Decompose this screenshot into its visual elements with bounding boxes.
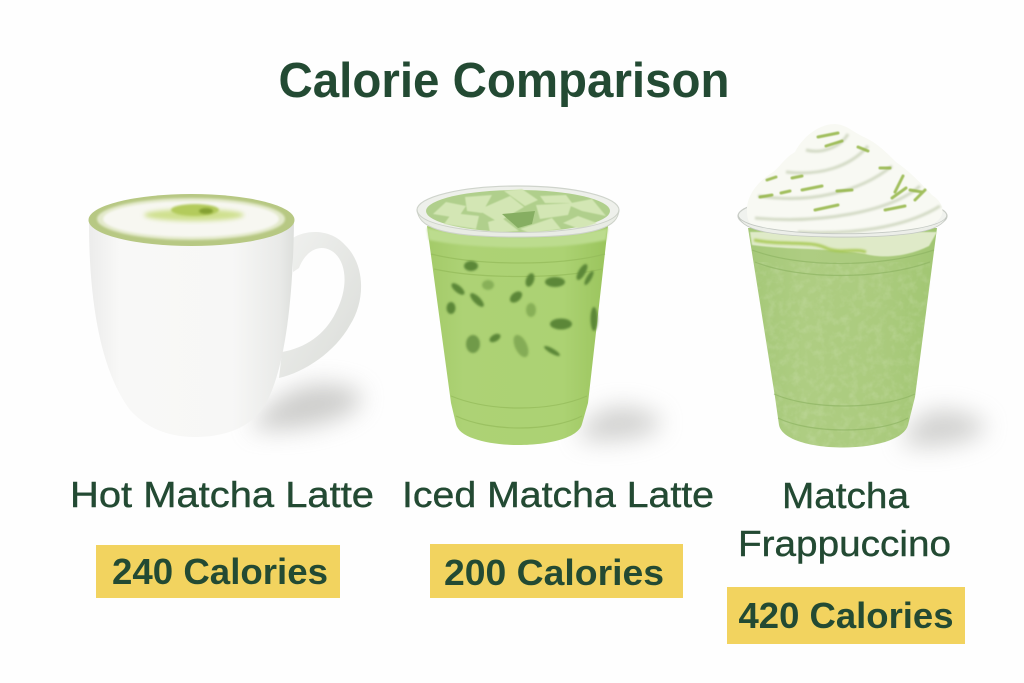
cup ridges [752,250,934,430]
cup body [748,228,937,448]
calorie badge: 240 [96,545,340,598]
calorie badge: 240: 240 Calories [112,551,328,592]
label: matcha frappuccino: Frappuccino [738,523,951,564]
ice surface [426,190,610,232]
cup shadow [902,410,985,447]
cream swirl shading [755,134,940,233]
foam band [427,228,608,248]
calorie badge: 420: 420 Calories [738,595,954,636]
drink: iced matcha latte cup [417,186,661,445]
calorie badge: 200: 200 Calories [444,552,664,593]
cup liquid [427,226,608,445]
latte surface [88,194,294,246]
title: Calorie Comparison [278,54,730,108]
cup shadow [578,407,661,441]
lid rim back [417,186,619,234]
calorie badge: 200 [430,544,683,598]
matcha dusting [760,133,925,210]
drink: hot matcha latte mug [88,194,361,437]
lid rim front [417,210,619,237]
iced matcha swirls [446,261,598,359]
drink: matcha frappuccino cup [738,124,985,448]
mug shadow [250,384,361,430]
cream drip under lid [750,232,937,256]
label: matcha frappuccino [738,475,951,564]
label: iced matcha latte: Iced Matcha Latte [402,474,714,515]
matcha powder [144,209,244,221]
cup ridges [431,254,605,428]
calorie badge: 420 [727,587,965,644]
label: hot matcha latte: Hot Matcha Latte [70,474,374,515]
lid front edge [738,215,947,237]
ice cubes [433,189,606,233]
lid [738,195,947,237]
mug body [89,222,294,437]
whipped cream [747,124,942,237]
mug handle [279,232,361,378]
frappuccino texture [750,262,934,448]
label: matcha frappuccino: Matcha [782,475,910,516]
